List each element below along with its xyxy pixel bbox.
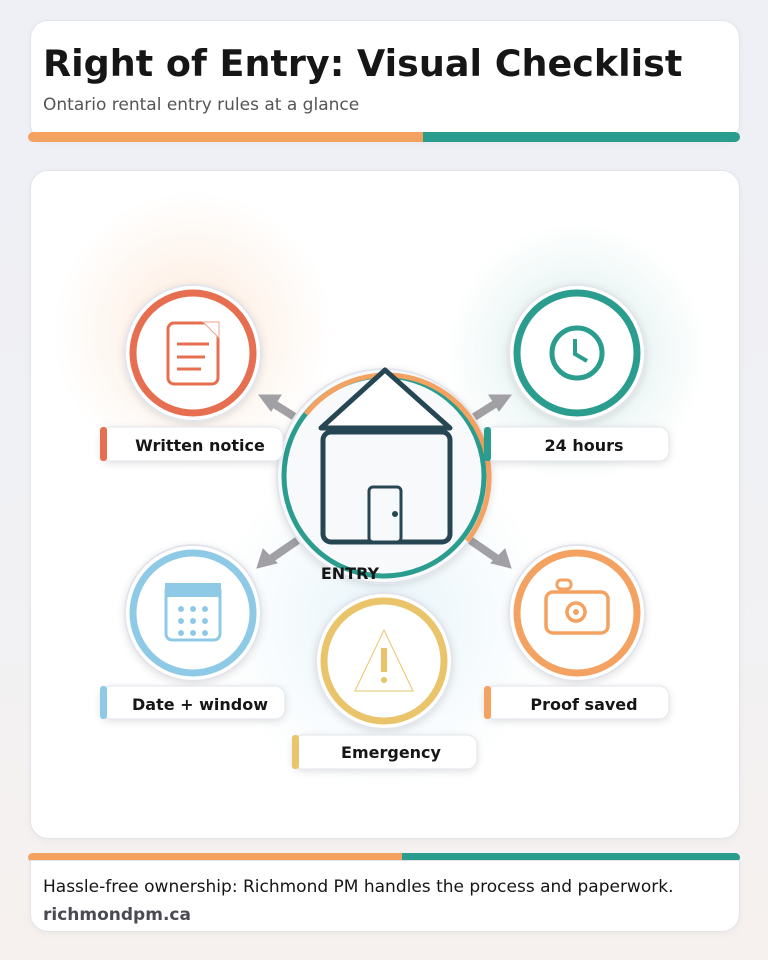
node: written notice xyxy=(125,285,261,421)
label: date + window: Date + window xyxy=(132,695,268,714)
arrows xyxy=(257,395,511,581)
label: written notice xyxy=(100,427,283,461)
footer bar xyxy=(28,853,740,862)
label: 24 hours: 24 hours xyxy=(544,436,624,455)
label: proof saved xyxy=(484,686,669,719)
subtitle: Ontario rental entry rules at a glance xyxy=(43,95,359,115)
center: entry house: ENTRY xyxy=(321,564,380,583)
label: proof saved: Proof saved xyxy=(530,695,638,714)
center: entry house xyxy=(277,369,491,583)
label: emergency: Emergency xyxy=(341,743,442,762)
label: emergency xyxy=(292,735,477,769)
header card xyxy=(30,20,740,142)
footer text: Hassle-free ownership: Richmond PM handles the process and paperwork. xyxy=(43,877,673,897)
node: emergency xyxy=(316,593,452,729)
main panel xyxy=(30,170,740,839)
title: Right of Entry: Visual Checklist xyxy=(43,42,682,85)
node: 24 hours clock xyxy=(509,285,645,421)
label: written notice: Written notice xyxy=(135,436,265,455)
label: date + window xyxy=(100,686,285,719)
node: calendar xyxy=(125,545,261,681)
label: 24 hours xyxy=(484,427,669,461)
header bar xyxy=(28,132,740,142)
footer card xyxy=(30,860,740,932)
footer url: richmondpm.ca xyxy=(43,905,191,925)
node: camera xyxy=(509,545,645,681)
